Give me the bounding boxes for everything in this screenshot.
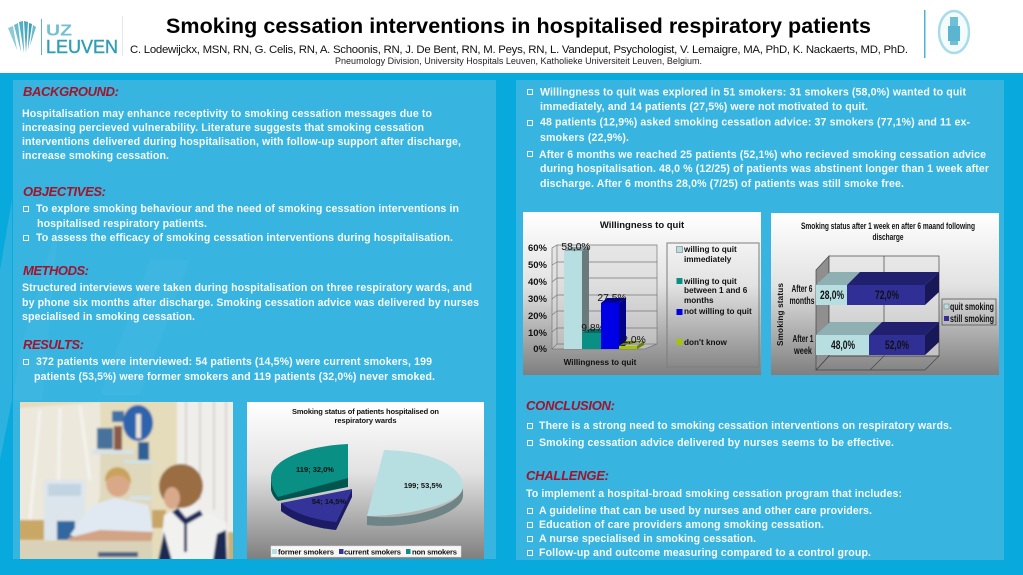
heading: background: BACKGROUND: [23,84,119,99]
axis labels: months [790,296,815,307]
legend: non smokers [412,548,457,556]
axis labels: week [793,346,812,357]
heading: challenge: CHALLENGE: [526,468,609,483]
legend: willing to quit [683,277,737,286]
text: findings: 48 patients (12,9%) asked smoking cessation advice: 37 smokers (77,1%) and 11 ex- [540,116,970,128]
axis labels: After 1 [792,334,814,345]
text: background [22,108,461,162]
legend: immediately [684,255,732,264]
legend: former smokers [278,548,334,556]
text: findings: After 6 months we reached 25 patients (52,1%) who recieved smoking cessation advice [539,149,986,161]
axis labels: 50% [528,260,548,271]
panel: left [13,80,496,559]
text: objectives: To explore smoking behaviour and the need of smoking cessation interventions in [36,203,459,215]
chart: willingness to quit [523,212,761,375]
bar: after 1 week [816,322,939,355]
text: findings: during hospitalisation. 48,0 % (12/25) of patients was abstinent longer than 1 week after [540,163,989,175]
text: methods: Structured interviews were taken during hospitalisation on three respiratory wards, and [22,282,472,294]
bar: don't know: 2,0% [622,335,646,346]
text: background: Hospitalisation may enhance receptivity to smoking cessation messages due to [22,108,433,120]
axis labels: 40% [528,277,548,288]
slice: current smokers [281,489,352,530]
axis labels: 30% [528,294,548,305]
text: conclusion: Smoking cessation advice delivered by nurses seems to be effective. [539,437,894,449]
legend [271,546,461,557]
chart title: respiratory wards [334,416,396,425]
text: objectives: To assess the efficacy of smoking cessation interventions during hospitalisation. [36,232,453,244]
legend: months [684,296,714,305]
text: challenge: Education of care providers among smoking cessation. [539,519,824,531]
text: findings: discharge. After 6 months 28,0% (7/25) of patients was still smoke free. [540,178,904,190]
text: background: increasing percieved vulnerability. Literature suggests that smoking cessation [22,122,424,134]
bar: after 6 months [816,272,939,305]
text: methods: by phone six months after discharge. Smoking cessation advice was delivered by nurses [22,297,479,309]
logo: UZ Leuven: UZ [46,22,73,40]
text: challenge: To implement a hospital-broad smoking cessation program that includes: [526,488,902,500]
text: methods: specialised in smoking cessation. [22,311,195,323]
text: results [24,356,435,383]
legend [942,299,996,325]
icon: university seal [924,10,969,58]
slice: former smokers [367,450,463,526]
axis labels: After 6 [792,284,813,295]
right text column [526,86,989,559]
chart title [292,407,439,425]
left text column [22,84,479,383]
bar: willing immediately: 58,0% [561,242,591,253]
legend: not willing to quit [684,307,752,316]
text: background: increase smoking cessation. [22,150,169,162]
text: challenge [526,488,902,559]
legend: don't know [684,338,728,347]
affiliation: Pneumology Division, University Hospitals Leuven, Katholieke Universiteit Leuven, Belgium. [335,56,702,66]
bar: not willing: 27,5% [597,293,627,304]
slice: non smokers: 119; 32,0% [296,465,334,474]
bar: after 1 week: 48,0% [831,340,855,352]
text: findings: smokers (22,9%). [540,132,629,144]
chart title: Willingness to quit [600,220,685,231]
text: findings [528,86,989,190]
legend: still smoking [950,314,994,325]
title: Smoking cessation interventions in hospitalised respiratory patients [166,14,871,38]
axis labels: 10% [528,328,548,339]
text: objectives: hospitalised respiratory patients. [37,218,207,230]
bar: after 6 months: 72,0% [875,290,899,302]
bar: willing immediately [561,242,591,349]
text: methods [22,282,479,323]
legend: current smokers [344,548,401,556]
slice: current smokers: 54; 14,5% [312,497,346,506]
chart title: discharge [872,232,904,243]
heading: conclusion: CONCLUSION: [526,398,615,413]
legend [667,243,759,367]
plot walls [816,256,939,370]
heading: objectives: OBJECTIVES: [23,184,106,199]
text: findings: immediately, and 14 patients (27,5%) were not motivated to quit. [540,101,868,113]
text: challenge: A guideline that can be used by nurses and other care providers. [539,505,872,517]
axis labels: 20% [528,311,548,322]
logo: UZ Leuven [8,16,123,57]
bar: between 1 and 6 months [581,323,607,349]
axis labels: 0% [533,344,548,355]
text: results: 372 patients were interviewed: 54 patients (14,5%) were current smokers, 199 [36,356,432,368]
authors: C. Lodewijckx, MSN, RN, G. Celis, RN, A. Schoonis, RN, J. De Bent, RN, M. Peys, RN, L. Vandeput, Psychologist, V. Lemaigre, MA, PhD, K. Nackaerts, MD, PhD. [130,44,908,56]
bar: between 1 and 6 months: 9,8% [581,323,605,334]
logo: UZ Leuven: LEUVEN [46,36,118,57]
text: challenge: Follow-up and outcome measuring compared to a control group. [539,547,871,559]
axis labels [528,243,548,355]
axes and grid [552,245,657,349]
heading: results: RESULTS: [23,337,84,352]
legend: quit smoking [950,302,994,313]
chart: smoking status after discharge [771,213,999,375]
panel: right [516,80,1004,560]
text: background: interventions delivered during hospitalisation, with follow-up support after discharge, [22,136,461,148]
axis title: Willingness to quit [564,358,637,367]
text: challenge: A nurse specialised in smoking cessation. [539,533,756,545]
photo: nurse and patient [18,400,235,561]
axis title: Smoking status [776,283,785,346]
slice: non smokers [271,444,348,501]
bar: after 6 months: 28,0% [820,290,844,302]
chart title: Smoking status of patients hospitalised on [292,407,439,416]
axis labels: 60% [528,243,548,254]
text: objectives [24,203,459,244]
axis labels [790,284,815,357]
slice: former smokers: 199; 53,5% [404,481,443,490]
text: conclusion [528,420,952,449]
bar: not willing [597,293,627,349]
bar: don't know [619,335,646,349]
text: findings: Willingness to quit was explored in 51 smokers: 31 smokers (58,0%) wanted to quit [540,86,966,98]
chart title [801,221,975,243]
legend: willing to quit [683,245,737,254]
chart: smoking status pie [247,402,484,559]
legend: between 1 and 6 [684,286,748,295]
text: conclusion: There is a strong need to smoking cessation interventions on respiratory wards. [539,420,952,432]
bar: after 1 week: 52,0% [885,340,909,352]
heading: methods: METHODS: [23,263,89,278]
text: results: patients (53,5%) were former smokers and 119 patients (32,0%) never smoked. [34,371,435,383]
